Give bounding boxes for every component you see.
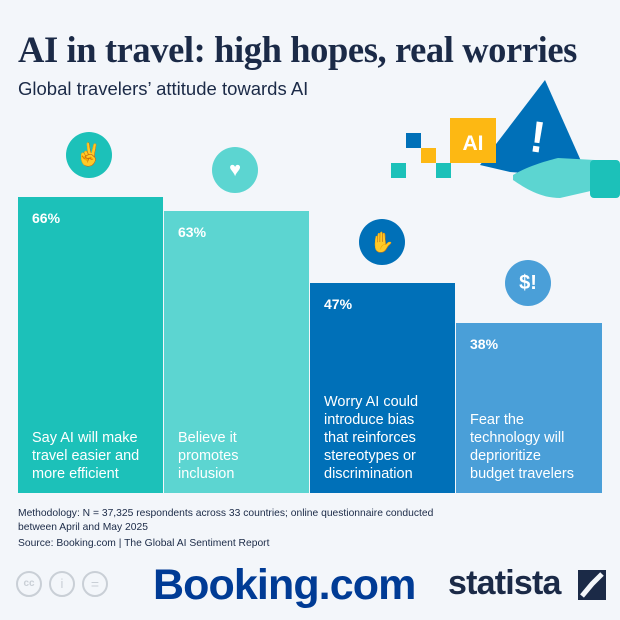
logo: Booking.com: Booking.com	[153, 561, 415, 609]
bar: 63%: Believe it	[178, 430, 237, 446]
bar: 47%: Worry AI could	[324, 394, 418, 410]
bar: 63%: 63%	[178, 224, 206, 240]
methodology and source	[18, 508, 433, 549]
bar: 38%: Fear the	[470, 412, 524, 428]
bar: 38%: 38%	[470, 336, 498, 352]
icon: hand and person: ✋	[370, 232, 394, 254]
logo: statista: statista	[448, 564, 561, 602]
bar: 47%: 47%	[324, 296, 352, 312]
icon: dollar warning	[505, 260, 551, 306]
bar: 66%	[18, 197, 163, 493]
bar: 47%: that reinforces	[324, 430, 416, 446]
bar: 47%	[310, 283, 455, 493]
bar: 38%: budget travelers	[470, 466, 574, 482]
illustration: AI warning: AI	[462, 132, 484, 155]
subtitle: Global travelers’ attitude towards AI	[18, 78, 308, 99]
bar: 38%: technology will	[470, 430, 564, 446]
cc icons: i	[61, 576, 63, 591]
icon: crossed fingers: ✌	[75, 142, 103, 167]
methodology and source: Methodology: N = 37,325 respondents across 33 countries; online questionnaire conducted	[18, 508, 433, 519]
icon: dollar warning: $!	[519, 272, 537, 294]
bar: 66%: more efficient	[32, 466, 119, 482]
cc icons: =	[91, 576, 99, 592]
bar: 63%: inclusion	[178, 466, 234, 482]
icon: heart in hand	[212, 147, 258, 193]
illustration: AI warning: !	[527, 112, 548, 163]
cc icons	[16, 571, 108, 597]
bar: 66%: Say AI will make	[32, 430, 138, 446]
icon: crossed fingers	[66, 132, 112, 178]
methodology and source: between April and May 2025	[18, 522, 148, 533]
methodology and source: Source: Booking.com | The Global AI Sentiment Report	[18, 538, 269, 549]
bar: 63%	[164, 211, 309, 493]
bar: 38%	[456, 323, 602, 493]
cc icons: cc	[23, 578, 35, 589]
bar: 66%: 66%	[32, 210, 60, 226]
icon: hand and person	[359, 219, 405, 265]
bar: 38%: deprioritize	[470, 448, 541, 464]
bar: 66%: travel easier and	[32, 448, 139, 464]
bar: 47%: stereotypes or	[324, 448, 416, 464]
bar: 47%: discrimination	[324, 466, 413, 482]
icon: heart in hand: ♥	[229, 158, 241, 180]
illustration: AI warning	[391, 80, 620, 198]
bar: 63%: promotes	[178, 448, 238, 464]
bar: 47%: introduce bias	[324, 412, 414, 428]
title: AI in travel: high hopes, real worries	[18, 29, 577, 70]
